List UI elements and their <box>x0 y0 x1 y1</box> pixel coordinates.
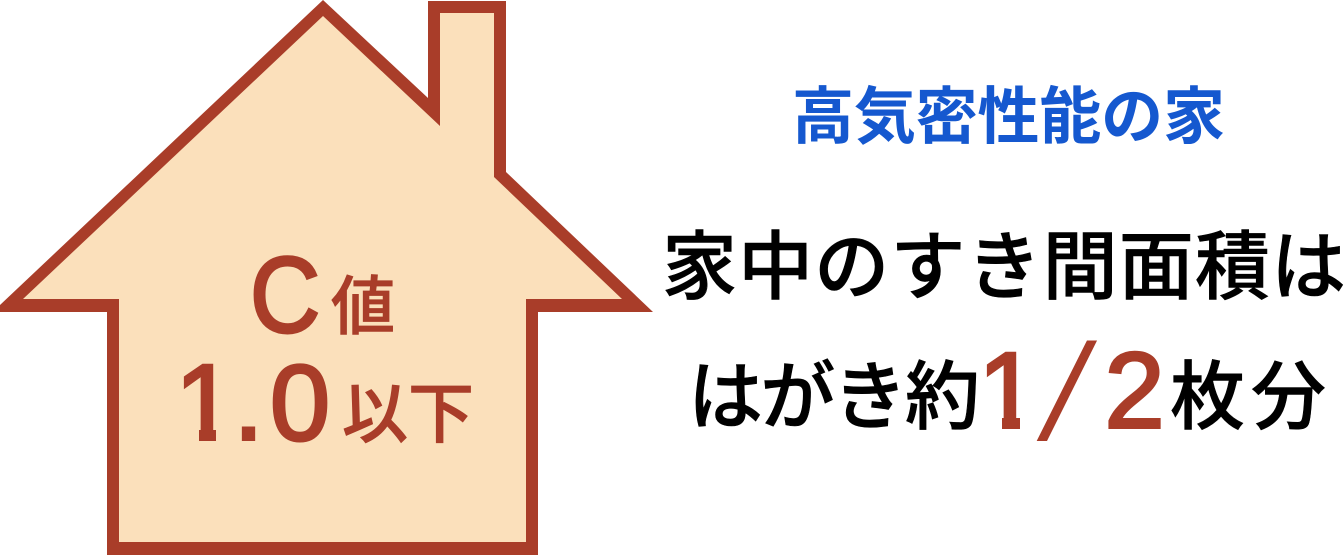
highlighted fraction: 2 <box>1104 330 1165 450</box>
house label: C value: 値 <box>331 256 395 348</box>
highlighted fraction: / <box>1030 318 1103 469</box>
house label: 1.0 or less: . <box>234 342 264 462</box>
panel: house with C value <box>0 0 653 555</box>
line 2: はがき約 <box>688 336 980 445</box>
house label: 1.0 or less: 以下 <box>342 361 474 457</box>
line 2 <box>696 340 1325 441</box>
house fill <box>23 13 622 542</box>
highlighted fraction: 1 <box>978 330 1038 450</box>
house label: 1.0 or less: 1 <box>175 342 235 462</box>
house label: 1.0 or less: 0 <box>270 342 330 463</box>
text block: gap area description <box>665 229 1344 441</box>
line 1: 家中のすき間面積は <box>662 206 1344 315</box>
house label: 1.0 or less <box>184 363 471 444</box>
line 2: 枚分 <box>1170 336 1326 445</box>
house label: C value <box>250 234 395 355</box>
heading: high airtightness home: 高気密性能の家 <box>792 66 1225 156</box>
highlighted fraction <box>986 340 1161 441</box>
house label: C value: C <box>250 234 320 355</box>
icon: house outline with chimney <box>0 0 653 555</box>
